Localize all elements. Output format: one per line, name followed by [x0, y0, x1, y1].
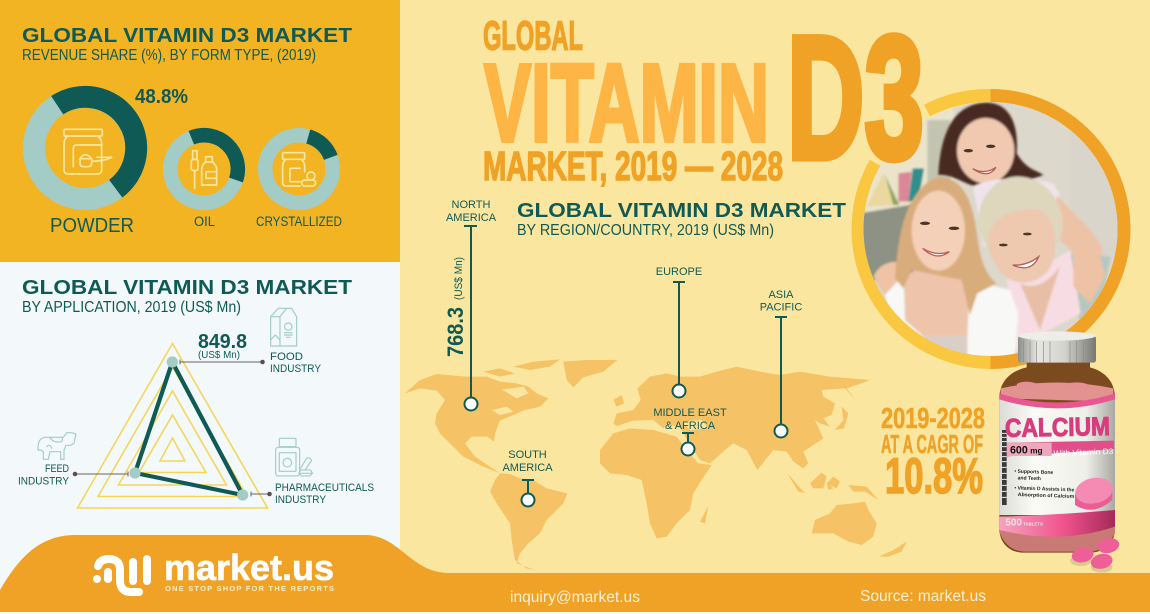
- label: pharmaceuticals industry: INDUSTRY: [275, 494, 327, 506]
- label: crystallized: CRYSTALLIZED: [256, 214, 342, 229]
- footer: contact email: inquiry@market.us: [510, 589, 640, 606]
- label text: benefits: • Supports Bone: [1014, 469, 1054, 476]
- icon: oil bottle and dropper: [191, 151, 217, 188]
- label tablet: [1073, 474, 1115, 510]
- bottle label: [999, 393, 1115, 537]
- icon: milk carton: [271, 308, 297, 346]
- label: asia pacific: ASIA: [768, 289, 794, 301]
- title: [483, 12, 783, 189]
- label text: benefits: [1014, 469, 1075, 500]
- cagr value: 10.8%: [885, 448, 983, 504]
- tablets inside: [1000, 382, 1115, 552]
- heading: region: GLOBAL VITAMIN D3 MARKET: [517, 200, 846, 222]
- logo wordmark: market.us: [164, 547, 334, 588]
- bottle body: [999, 362, 1115, 553]
- value: food industry: 849.8: [198, 331, 247, 353]
- label: south america: AMERICA: [502, 462, 553, 474]
- icon: cow: [38, 433, 76, 459]
- title line: global: GLOBAL: [483, 12, 583, 58]
- pin: europe: [672, 282, 686, 398]
- panel: by application: [0, 262, 400, 614]
- leader: food: [180, 360, 265, 364]
- pin: middle east and africa: [682, 433, 694, 456]
- label text: with vitamin d3: With Vitamin D3: [1053, 447, 1114, 458]
- icon: market.us mark: [93, 559, 147, 592]
- donut: oil: [170, 135, 238, 203]
- pin: asia pacific: [774, 317, 788, 438]
- bottle cap: [1018, 331, 1096, 363]
- value: powder share: 48.8%: [135, 86, 188, 108]
- photo: three generations: [860, 100, 1127, 360]
- photo ring: [858, 95, 1124, 363]
- radar chart: [78, 344, 268, 508]
- subheading: form type: REVENUE SHARE (%), BY FORM TYPE, (2019): [22, 47, 316, 64]
- leader: pharmaceuticals: [251, 492, 272, 496]
- title line: vitamin: VITAMIN: [484, 42, 769, 165]
- label text: calcium: CALCIUM: [1005, 411, 1110, 443]
- label: europe: EUROPE: [656, 266, 702, 278]
- unit: north america: (US$ Mn): [453, 257, 465, 300]
- label: powder: POWDER: [50, 215, 134, 237]
- label: pharmaceuticals industry: PHARMACEUTICALS: [275, 482, 374, 494]
- label: feed industry: INDUSTRY: [18, 476, 70, 488]
- label: south america: SOUTH: [508, 449, 547, 461]
- pin: north america: [464, 226, 478, 410]
- heading: application: GLOBAL VITAMIN D3 MARKET: [22, 277, 352, 299]
- logo tagline: ONE STOP SHOP FOR THE REPORTS: [165, 584, 334, 593]
- unit: food industry: (US$ Mn): [198, 349, 240, 361]
- pin: south america: [522, 480, 534, 506]
- label text: benefits: • Vitamin D Assists in the: [1014, 485, 1075, 493]
- cagr label: AT A CAGR OF: [881, 429, 983, 459]
- heading: form type: GLOBAL VITAMIN D3 MARKET: [22, 25, 352, 47]
- loose tablets: [1070, 536, 1121, 573]
- label text: tablet count: 500 TABLETS: [1005, 518, 1043, 529]
- label: feed industry: FEED: [45, 463, 69, 475]
- title line: market years: MARKET, 2019 — 2028: [483, 143, 783, 189]
- leader: feed: [73, 472, 128, 476]
- icon: powder jar: [64, 129, 112, 174]
- cagr years: 2019-2028: [881, 403, 985, 435]
- panel: world map by region: [405, 199, 907, 570]
- map: continents: [405, 359, 907, 570]
- subheading: region: BY REGION/COUNTRY, 2019 (US$ Mn): [517, 222, 774, 239]
- label text: benefits: Absorption of Calcium: [1018, 492, 1075, 500]
- label: middle east and africa: MIDDLE EAST: [653, 407, 727, 419]
- label: north america: AMERICA: [446, 212, 497, 224]
- label: food industry: INDUSTRY: [270, 363, 322, 375]
- icon: supplement jar: [276, 438, 313, 476]
- label text: dosage: 600 mg: [1010, 444, 1043, 456]
- label: food industry: FOOD: [270, 351, 303, 363]
- logo: market.us: [93, 547, 334, 593]
- subheading: application: BY APPLICATION, 2019 (US$ Mn): [22, 299, 241, 316]
- label text: benefits: and Teeth: [1018, 475, 1041, 482]
- product: calcium bottle: [999, 331, 1121, 573]
- footer: orange band and curve: [0, 535, 1150, 614]
- label: middle east and africa: & AFRICA: [665, 420, 716, 432]
- icon: crystal jar and capsules: [283, 153, 316, 186]
- title letters: D3: D3: [787, 1, 924, 196]
- donut: powder: [34, 97, 136, 199]
- footer: source: Source: market.us: [860, 588, 986, 605]
- label: asia pacific: PACIFIC: [760, 302, 802, 314]
- panel: revenue share by form: [0, 0, 400, 262]
- value: north america: 768.3: [443, 307, 468, 357]
- label: oil: OIL: [194, 214, 215, 229]
- label: north america: NORTH: [452, 199, 491, 211]
- donut: crystallized: [265, 135, 333, 203]
- callout: cagr: [881, 403, 985, 504]
